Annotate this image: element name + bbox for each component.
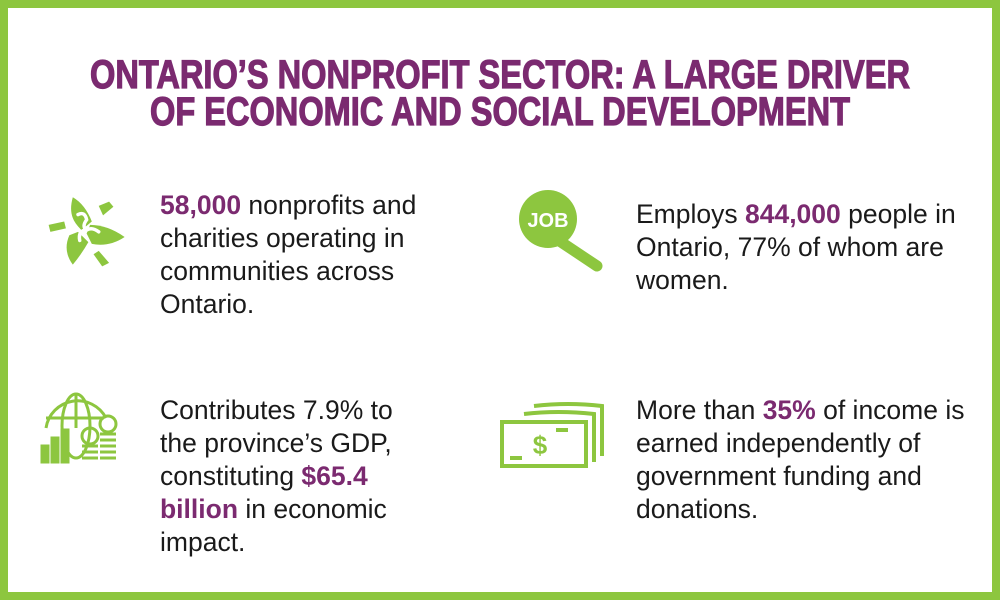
icon: job magnifier: JOB bbox=[527, 210, 569, 232]
title: OF ECONOMIC AND SOCIAL DEVELOPMENT bbox=[150, 89, 850, 134]
icon: globe coins chart bbox=[40, 392, 118, 464]
text: employs: Employs 844,000 people in Ontario, 77% of whom are women. bbox=[636, 199, 956, 295]
text: GDP: Contributes 7.9% to the province’s GDP, constituting $65.4 billion in economic impact. bbox=[160, 395, 393, 557]
icon: job magnifier bbox=[519, 190, 602, 272]
text: income: More than 35% of income is earned independently of government funding and donations. bbox=[636, 395, 964, 524]
icon: money bills bbox=[500, 402, 604, 468]
title: ONTARIO’S NONPROFIT SECTOR: A LARGE DRIVER bbox=[90, 52, 910, 97]
text: nonprofits: 58,000 nonprofits and charities operating in communities across Ontario. bbox=[160, 190, 416, 319]
icon: money bills: $ bbox=[533, 430, 548, 460]
title bbox=[90, 52, 910, 134]
icon: star logo bbox=[48, 197, 124, 266]
